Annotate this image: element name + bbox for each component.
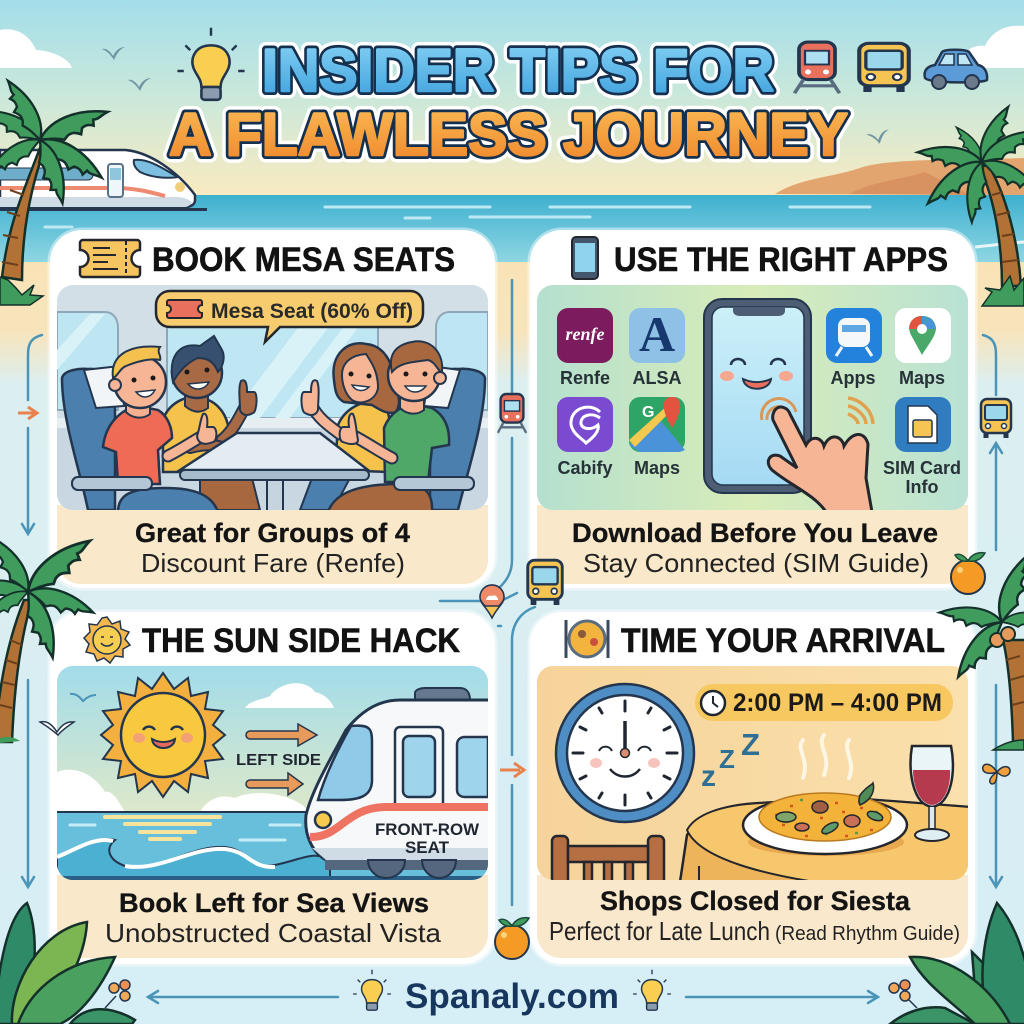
sea: [57, 812, 488, 880]
illustration: coastal view: FRONT-ROW: [375, 820, 480, 839]
person: yellow shirt: [163, 336, 257, 472]
panel: use the right apps: [530, 230, 975, 588]
sleeping zzz: [702, 734, 760, 786]
clouds: [245, 683, 334, 708]
wine glass: [911, 746, 953, 841]
app label: Apps: [830, 368, 876, 388]
icon: footer bulb left: [353, 970, 391, 1010]
title: INSIDER TIPS FOR: [262, 37, 774, 104]
seats: [62, 369, 115, 510]
title: INSIDER TIPS FOR: [262, 37, 774, 104]
icon: google maps: [629, 397, 685, 452]
caption: (Read Rhythm Guide): [775, 923, 960, 945]
title: INSIDER TIPS FOR: [262, 37, 774, 104]
plate of paella: [743, 783, 907, 856]
plant: bottom left: [0, 903, 135, 1024]
sun with face: [101, 673, 225, 797]
icon: orange bottom: [495, 918, 529, 959]
palm: middle right: [939, 553, 1024, 750]
plant: bottom right: [890, 903, 1024, 1024]
app label: Cabify: [557, 458, 613, 478]
caption: [105, 888, 442, 948]
app label: Renfe: [560, 368, 610, 388]
app label: SIM Card: [883, 458, 961, 478]
caption: Shops Closed for Siesta: [600, 886, 911, 916]
icon: map pin: [480, 585, 504, 618]
illustration: siesta lunch: [537, 666, 970, 886]
route lines and arrows: [22, 280, 1002, 1003]
app label: Maps: [899, 368, 945, 388]
chair: [552, 836, 664, 886]
icon: footer bulb right: [633, 970, 671, 1010]
table: [680, 798, 970, 882]
icon: transit app: [826, 308, 882, 363]
person: green shirt: [340, 341, 449, 482]
app label: Info: [906, 477, 938, 497]
callout: mesa seat: [156, 291, 423, 342]
caption: Discount Fare (Renfe): [141, 548, 405, 578]
caption: Download Before You Leave: [572, 518, 938, 548]
clock: [556, 684, 694, 822]
pointing hand: [768, 407, 872, 512]
heading: TIME YOUR ARRIVAL: [621, 622, 945, 660]
heading: THE SUN SIDE HACK: [142, 622, 460, 660]
caption: [549, 886, 960, 946]
steam: [801, 735, 851, 778]
arrow: left route: [18, 407, 37, 419]
sleeping zzz: Z: [719, 744, 735, 774]
bird: white: [40, 722, 74, 735]
illustration: group at table: [57, 285, 488, 512]
icon: footer flower left: [105, 980, 130, 1008]
icon: title car: [925, 50, 987, 89]
caption: Perfect for Late Lunch: [549, 916, 770, 946]
panel: the sun side hack: [50, 612, 495, 964]
icon: title train: [794, 42, 840, 93]
icon: footer flower right: [889, 980, 917, 1008]
icon: small sun: [84, 617, 130, 663]
brand name: Spanaly.com: [405, 977, 619, 1016]
icon: renfe: [557, 308, 613, 363]
heading: BOOK MESA SEATS: [152, 241, 455, 279]
illustration: apps: [537, 285, 968, 512]
arrows: left side: [246, 724, 317, 795]
icon: renfe: renfe: [566, 324, 604, 344]
person: woman: [301, 343, 399, 472]
person: red shirt: [103, 347, 216, 484]
label: left side: LEFT SIDE: [236, 752, 321, 769]
palm: top left: [0, 77, 112, 305]
app label: Maps: [634, 458, 680, 478]
caption: [572, 518, 938, 578]
icon: smartphone: [572, 237, 598, 279]
icon: paella plate: [566, 620, 608, 658]
icon: orange right: [951, 553, 985, 594]
icon: sim card: [895, 397, 951, 452]
icon: alsa: [629, 306, 685, 363]
icon: wifi waves: [848, 398, 873, 424]
icon: light bulb: [177, 28, 245, 100]
icon: butterfly: [983, 764, 1010, 784]
birds in sky: [102, 47, 891, 145]
panel: time your arrival: [530, 612, 975, 964]
footer: [105, 970, 917, 1016]
illustration: coastal view: SEAT: [405, 838, 450, 857]
app label: ALSA: [632, 368, 682, 388]
arrow: centre route: [500, 763, 524, 777]
illustration: coastal view: [57, 666, 490, 880]
time pill: [695, 684, 953, 721]
sleeping zzz: Z: [741, 727, 760, 762]
icon: bus on route (right): [981, 399, 1011, 438]
icon: maps pin: [895, 308, 951, 363]
time pill: 2:00 PM – 4:00 PM: [733, 689, 942, 717]
palm: middle left: [0, 533, 98, 743]
caption: Unobstructed Coastal Vista: [105, 918, 442, 948]
icon: bus on route (centre): [528, 560, 562, 605]
bird: [70, 694, 96, 701]
train front: [415, 688, 470, 700]
icon: ticket: [80, 240, 140, 277]
title: A FLAWLESS JOURNEY: [169, 101, 848, 168]
caption: Book Left for Sea Views: [119, 888, 429, 918]
phone with face: [704, 299, 811, 493]
armrests: [72, 477, 152, 490]
icon: cabify: [557, 397, 613, 452]
heading: USE THE RIGHT APPS: [614, 241, 948, 279]
panel: book mesa seats: [50, 230, 495, 588]
caption: Great for Groups of 4: [135, 518, 410, 548]
train on the coast: [0, 150, 207, 211]
sleeping zzz: z: [701, 760, 716, 793]
icon: alsa: A: [639, 306, 675, 362]
icon: google maps: G: [642, 404, 654, 421]
callout: mesa seat: Mesa Seat (60% Off): [211, 300, 413, 323]
icon: title bus: [859, 43, 909, 92]
caption: Stay Connected (SIM Guide): [583, 548, 929, 578]
title: A FLAWLESS JOURNEY: [169, 101, 848, 168]
icon: train on route: [498, 394, 526, 433]
title: [169, 28, 848, 168]
table and legs: [118, 433, 432, 512]
caption: [135, 518, 410, 578]
title: A FLAWLESS JOURNEY: [169, 101, 848, 168]
palm: top right: [917, 103, 1024, 306]
